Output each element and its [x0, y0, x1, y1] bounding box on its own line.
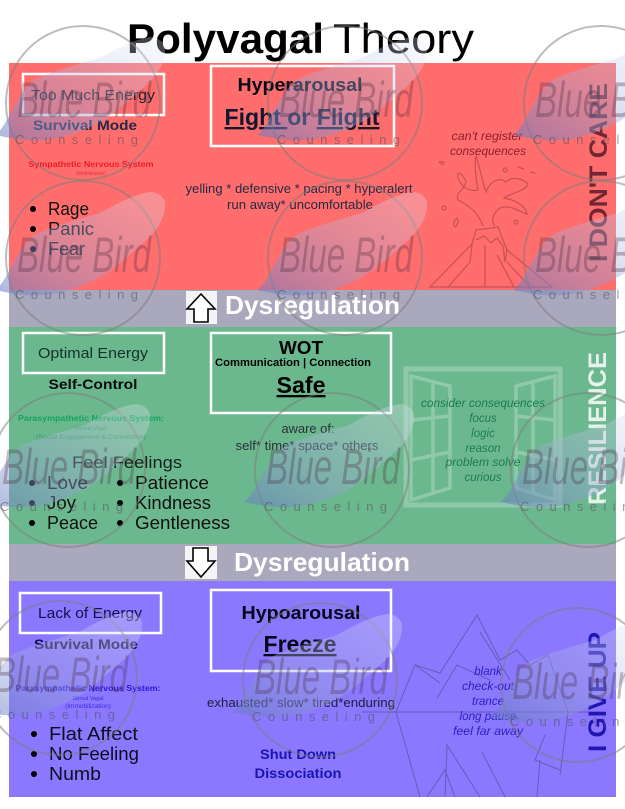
box: lack of energy [20, 593, 161, 633]
text: shut down dissociation [254, 746, 342, 781]
text: behaviours: run away* uncomfortable [227, 198, 373, 212]
text: blank check-out: feel far away [453, 726, 524, 738]
watermark: row 2 right [513, 181, 625, 335]
watermark: row 1 left: Blue Bird [17, 72, 152, 128]
watermark: row 2 middle: Blue Bird [279, 227, 414, 283]
list: rage panic fear: Fear [48, 239, 85, 259]
text: consider consequences: consider consequences [421, 398, 545, 410]
box: too much energy [23, 74, 164, 115]
text: blank check-out: blank [474, 666, 503, 678]
icon: up arrow [186, 291, 217, 324]
band: dysregulation up [9, 290, 616, 327]
box: hyperarousal fight or flight [211, 66, 394, 146]
label: parasympathetic ventral vagal: Parasympathetic Nervous System: [18, 413, 164, 423]
box: lack of energy: Lack of Energy [38, 605, 143, 622]
list: love joy peace: Love [47, 473, 88, 493]
label: parasympathetic dorsal vagal: Dorsal Vagal [72, 696, 104, 702]
text: blank check-out: trance [472, 696, 504, 708]
box: hypoarousal freeze [211, 590, 391, 671]
watermark: row 1 middle [257, 26, 427, 180]
label: I give up: I GIVE UP [584, 632, 612, 752]
icon: iceberg mountains [362, 615, 600, 797]
icon: volcano [430, 156, 552, 287]
title second word: Theory [333, 15, 474, 62]
watermark: row 1 middle: Blue Bird [279, 72, 414, 128]
watermark: row 3 right [500, 393, 625, 547]
list: flat affect no feeling numb [31, 724, 139, 784]
list: rage panic fear [30, 199, 94, 259]
watermark: row 1 right [513, 26, 625, 180]
watermark: row 2 left [0, 181, 165, 335]
watermark: row 4 middle [232, 603, 402, 757]
box: hypoarousal freeze: Freeze [264, 631, 336, 657]
watermark: row 1 middle: Counseling [277, 132, 400, 147]
title: Polyvagal [127, 15, 324, 62]
box: optimal energy: Optimal Energy [38, 345, 149, 362]
watermark: row 3 middle: Blue Bird [266, 439, 401, 495]
watermark: row 2 left: Blue Bird [17, 227, 152, 283]
box: hypoarousal freeze: Hypoarousal [242, 603, 360, 623]
text: aware of [236, 422, 378, 453]
list: patience kindness gentleness: Patience [135, 473, 209, 493]
label: sympathetic nervous system: Sympathetic Nervous System [28, 159, 154, 169]
list: patience kindness gentleness: Gentleness [135, 513, 230, 533]
box: too much energy: Too Much Energy [31, 87, 156, 104]
list: flat affect no feeling numb: Numb [49, 764, 101, 784]
text: blank check-out: long pause [460, 711, 516, 723]
watermark: row 3 left: Blue Bird [2, 439, 137, 495]
box: hyperarousal fight or flight: Hyperarousal [238, 75, 362, 95]
label: parasympathetic dorsal vagal: (Immobilization) [65, 703, 111, 710]
label: sympathetic nervous system [28, 159, 154, 177]
text: consider consequences: problem solve [444, 457, 520, 469]
text: shut down dissociation: Dissociation [254, 765, 342, 781]
list: rage panic fear: Panic [48, 219, 94, 239]
list: patience kindness gentleness: Kindness [135, 493, 211, 513]
label: I don't care: I DON'T CARE [585, 83, 613, 262]
text: blank check-out: check-out [462, 681, 515, 693]
label: self-control: Self-Control [48, 376, 138, 392]
watermark: row 3 middle: Counseling [264, 499, 387, 514]
band: dysregulation down: Dysregulation [234, 547, 410, 577]
watermark: row 4 right [490, 608, 625, 762]
watermark: row 4 left [0, 601, 142, 755]
watermark: row 1 left [0, 26, 165, 180]
box: WOT safe: Communication | Connection [215, 357, 371, 369]
label: parasympathetic dorsal vagal [16, 683, 161, 710]
text: aware of: self* time* space* others [236, 439, 378, 453]
watermark: row 4 middle: Counseling [252, 709, 375, 724]
label: survival mode: Survival Mode [33, 117, 137, 133]
watermark: row 2 middle [257, 181, 427, 335]
label: survival mode: Survival Mode [34, 636, 138, 652]
text: consequences: can't register [452, 131, 524, 143]
label: parasympathetic ventral vagal: (Social Engagement & Connection) [36, 434, 146, 441]
text: feel feelings: Feel Feelings [72, 453, 182, 472]
text: shut down dissociation: Shut Down [260, 746, 336, 762]
label: parasympathetic ventral vagal: Ventral Vagal [75, 426, 107, 432]
box: optimal energy [23, 333, 164, 373]
watermark: row 3 left: Counseling [0, 499, 123, 514]
box: hyperarousal fight or flight: Fight or Flight [224, 104, 380, 130]
text: exhausted: exhausted* slow* tired*enduring [207, 696, 395, 710]
label: sympathetic nervous system: (Mobilization) [76, 171, 106, 177]
text: consider consequences: reason [465, 443, 501, 455]
panel: hyperarousal [9, 63, 616, 290]
box: WOT safe: Safe [276, 372, 326, 398]
watermark: row 3 middle [244, 393, 414, 547]
list: flat affect no feeling numb: Flat Affect [49, 724, 138, 744]
band: dysregulation down [9, 544, 616, 581]
watermark: row 2 left: Counseling [15, 287, 138, 302]
label: resilience: RESILIENCE [584, 352, 612, 505]
watermark: row 4 middle: Blue Bird [254, 649, 389, 705]
text: consider consequences [421, 398, 545, 484]
list: flat affect no feeling numb: No Feeling [49, 744, 139, 764]
watermark: row 4 left: Blue Bird [0, 647, 129, 703]
text: aware of: aware of: [282, 422, 334, 436]
text: consider consequences: focus [469, 413, 497, 425]
panel: hypoarousal [9, 581, 616, 797]
text: consequences [450, 131, 526, 158]
watermark: row 1 left: Counseling [15, 132, 138, 147]
text: consider consequences: curious [464, 472, 502, 484]
watermark: row 2 middle: Counseling [277, 287, 400, 302]
label: parasympathetic ventral vagal [18, 413, 164, 441]
text: consequences: consequences [450, 146, 526, 158]
list: rage panic fear: Rage [48, 199, 89, 219]
watermark: row 3 left [0, 393, 150, 547]
band: dysregulation up: Dysregulation [225, 290, 400, 320]
text: blank check-out [453, 666, 524, 738]
icon: down arrow [185, 546, 217, 579]
panel: window of tolerance [9, 327, 616, 544]
text: behaviours: yelling * defensive * pacing * hyperalert [186, 182, 413, 196]
box: WOT safe [211, 333, 391, 413]
icon: window [406, 369, 560, 505]
list: love joy peace [29, 473, 98, 533]
text: consider consequences: logic [471, 428, 495, 440]
list: love joy peace: Peace [47, 513, 98, 533]
text: behaviours [186, 182, 413, 212]
list: patience kindness gentleness [117, 473, 230, 533]
list: love joy peace: Joy [47, 493, 76, 513]
label: parasympathetic dorsal vagal: Parasympathetic Nervous System: [16, 683, 161, 693]
box: WOT safe: WOT [279, 338, 323, 358]
